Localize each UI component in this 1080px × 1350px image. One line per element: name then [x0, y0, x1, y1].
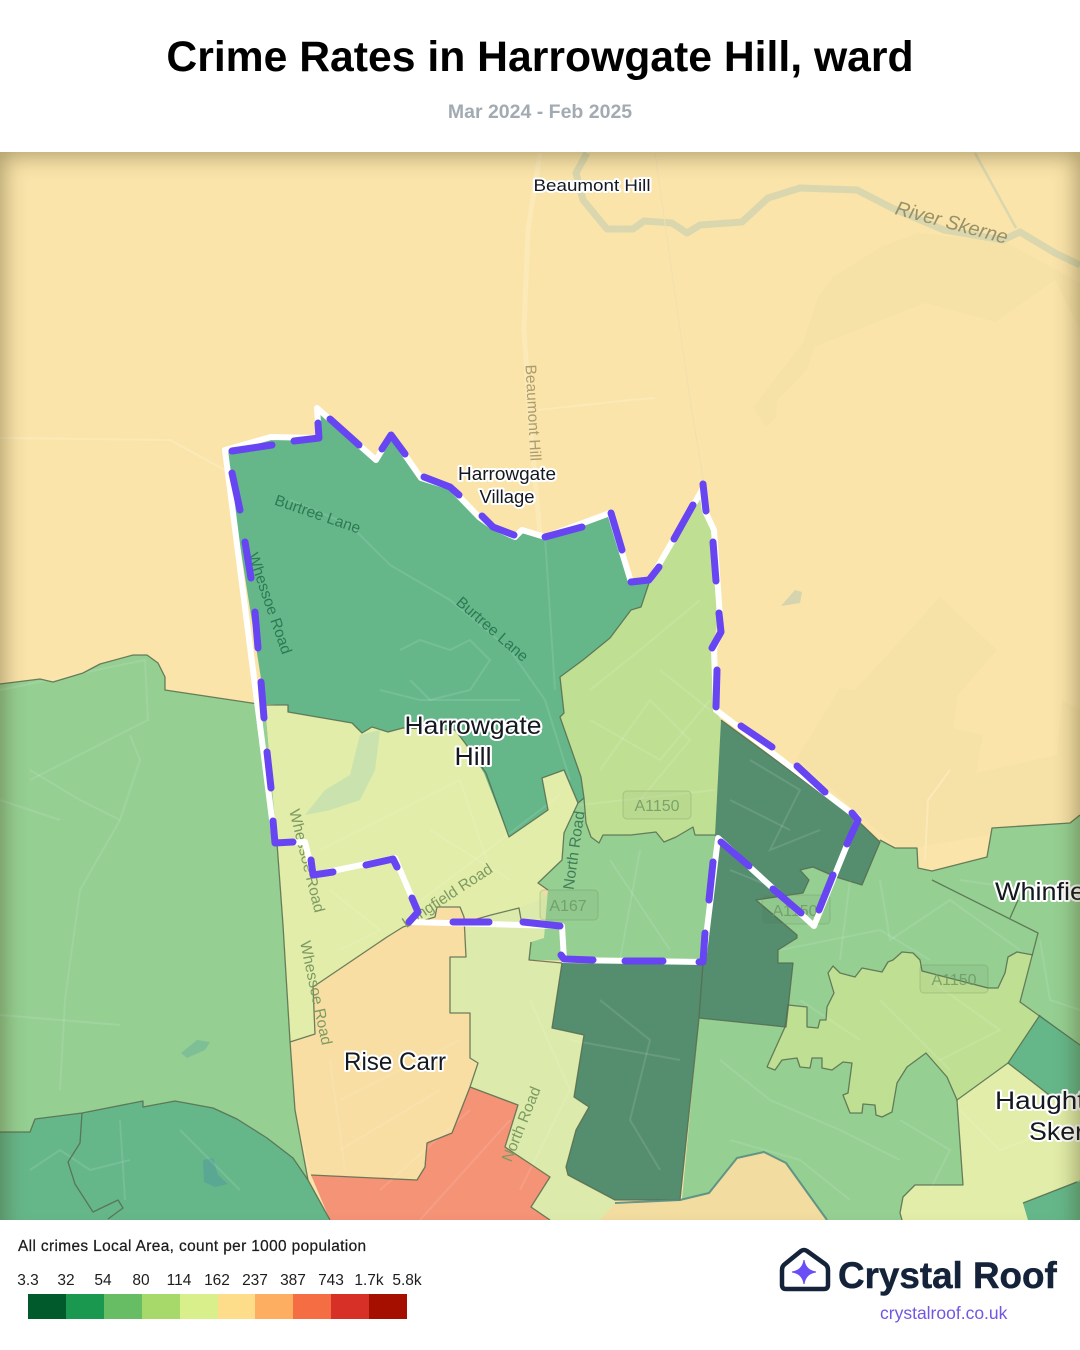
area: central light green — [529, 798, 715, 963]
area: west light green — [0, 655, 308, 1180]
legend values — [17, 1272, 422, 1289]
area boundary lines — [0, 580, 1080, 1220]
street labels: Longfield Road — [399, 861, 496, 932]
ward boundary purple dashes — [232, 419, 858, 962]
road badge labels: A167 — [549, 898, 587, 915]
place labels: Rise Carr — [344, 1048, 446, 1076]
legend values: 1.7k — [354, 1272, 384, 1289]
street labels: Burtree Lane — [453, 594, 531, 665]
area: yellow green west of ward — [265, 704, 578, 1042]
area: east green — [1008, 1015, 1080, 1100]
legend values: 80 — [132, 1272, 150, 1289]
legend values: 32 — [57, 1272, 75, 1289]
area: rise carr cream — [290, 907, 478, 1180]
icon: house with star — [780, 1248, 830, 1292]
area: east lime — [767, 952, 1040, 1117]
street labels: Whessoe Road — [296, 939, 335, 1047]
river skerne — [576, 153, 1080, 606]
legend title: All crimes Local Area, count per 1000 population — [18, 1238, 366, 1255]
faint rural roads — [0, 153, 950, 860]
area: dark green low crime — [552, 720, 880, 1200]
street labels: Burtree Lane — [272, 492, 363, 537]
road badge labels: A1150 — [634, 798, 680, 815]
website url: crystalroof.co.uk — [880, 1303, 1007, 1323]
place labels: Harrowgate — [404, 712, 542, 740]
legend values: 3.3 — [17, 1272, 39, 1289]
road badge labels — [549, 798, 977, 989]
place labels: Whinfie — [995, 878, 1080, 906]
place labels: Haught — [995, 1087, 1080, 1115]
street labels — [244, 198, 1010, 1164]
area: south east green — [1023, 1182, 1080, 1220]
street labels: North Road — [499, 1084, 545, 1164]
place labels: Sker — [1029, 1118, 1080, 1146]
ward boundary outline — [225, 408, 858, 962]
legend values: 743 — [318, 1272, 344, 1289]
legend values: 162 — [204, 1272, 230, 1289]
street labels: Beaumont Hill — [521, 364, 544, 461]
area: east light green — [680, 815, 1080, 1220]
logo: crystal roof — [780, 1248, 1058, 1323]
pond markers — [181, 730, 380, 1187]
legend — [17, 1238, 422, 1319]
place labels: Hill — [454, 743, 492, 771]
faint street network — [0, 500, 1080, 1220]
title: Crime Rates in Harrowgate Hill, ward — [166, 33, 914, 81]
area: haughton yellow — [900, 1063, 1080, 1220]
legend values: 237 — [242, 1272, 268, 1289]
road badge labels: A1150 — [772, 903, 818, 920]
legend values: 54 — [94, 1272, 112, 1289]
legend values: 5.8k — [392, 1272, 422, 1289]
legend values: 387 — [280, 1272, 306, 1289]
area: south west green — [0, 1101, 330, 1220]
date subtitle: Mar 2024 - Feb 2025 — [448, 101, 632, 123]
area: ward north green — [225, 408, 650, 837]
place labels — [344, 176, 1080, 1146]
area: river valley cream — [600, 1152, 827, 1220]
road badge labels: A1150 — [931, 972, 977, 989]
place labels: Harrowgate — [458, 464, 556, 484]
street labels: Whessoe Road — [285, 807, 327, 914]
place labels: Beaumont Hill — [534, 176, 650, 195]
area: high crime salmon — [311, 1087, 550, 1220]
legend colour ramp — [28, 1294, 407, 1319]
road badges — [540, 791, 988, 993]
area: lime north east of ward — [560, 490, 721, 843]
street labels: River Skerne — [893, 198, 1010, 249]
farmland shading — [753, 233, 1080, 850]
logo wordmark: Crystal Roof — [838, 1255, 1057, 1296]
street labels: Whessoe Road — [244, 551, 295, 656]
choropleth map — [0, 152, 1080, 1220]
area: yellow green south — [450, 890, 615, 1220]
street labels: North Road — [561, 810, 588, 891]
place labels: Village — [480, 487, 534, 507]
legend values: 114 — [167, 1272, 191, 1289]
